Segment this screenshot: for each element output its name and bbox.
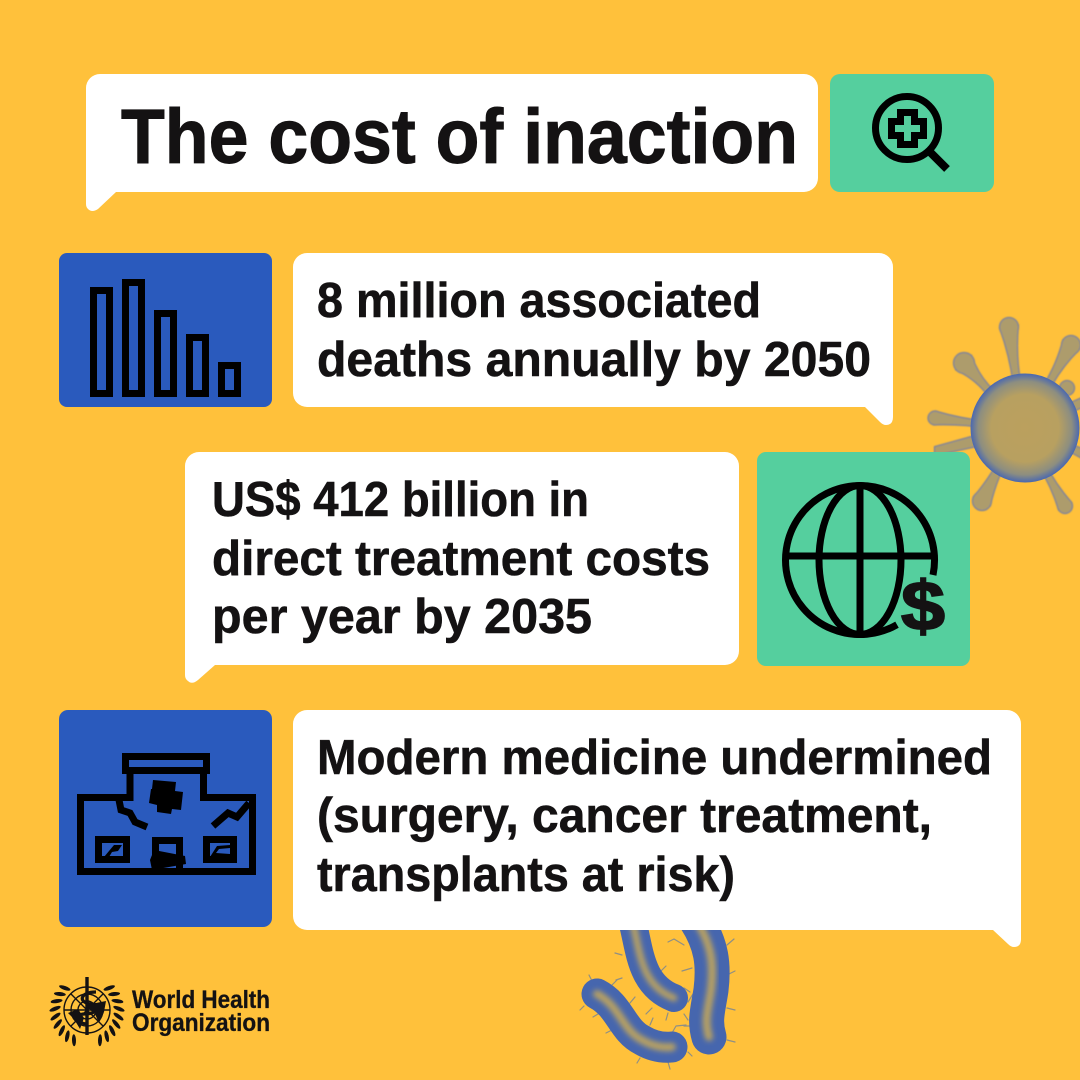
virus body: [970, 374, 1080, 482]
logo wordmark: World Health: [132, 986, 270, 1014]
speech bubble: title: [86, 74, 818, 211]
logo wordmark: Organization: [132, 1009, 270, 1037]
illustration: bacteria: [580, 920, 735, 1069]
text: cost statistic: US$ 412 billion in: [212, 473, 589, 527]
logo emblem: [49, 977, 125, 1046]
bacterium left: [597, 994, 672, 1047]
speech bubble: treatment costs: [185, 452, 739, 683]
illustration: virus: [928, 318, 1080, 513]
text: modern medicine: transplants at risk): [317, 848, 735, 902]
text: cost statistic: [212, 473, 710, 644]
icon: damaged hospital: [59, 710, 272, 927]
bacterium middle: [632, 920, 674, 998]
title: The cost of inaction: [121, 94, 798, 180]
icon: declining bar chart: [59, 253, 272, 407]
text: cost statistic: direct treatment costs: [212, 532, 710, 586]
speech bubble: deaths: [293, 253, 893, 425]
text: modern medicine: (surgery, cancer treatment,: [317, 789, 932, 843]
logo: World Health Organization: [49, 977, 270, 1046]
icon: globe with dollar sign: [757, 452, 970, 666]
logo wordmark: [132, 986, 270, 1037]
text: cost statistic: per year by 2035: [212, 590, 592, 644]
text: deaths statistic: 8 million associated: [317, 274, 761, 328]
text: deaths statistic: deaths annually by 2050: [317, 333, 871, 387]
text: modern medicine: [317, 731, 992, 902]
text: modern medicine: Modern medicine undermined: [317, 731, 992, 785]
bacterium right: [696, 920, 712, 1037]
text: deaths statistic: [317, 274, 871, 387]
icon: magnifier with medical cross: [830, 74, 994, 192]
bacteria hairs: [580, 939, 735, 1069]
speech bubble: modern medicine: [293, 710, 1021, 947]
virus spikes: [928, 318, 1080, 513]
icon: globe with dollar sign: $: [901, 567, 945, 645]
